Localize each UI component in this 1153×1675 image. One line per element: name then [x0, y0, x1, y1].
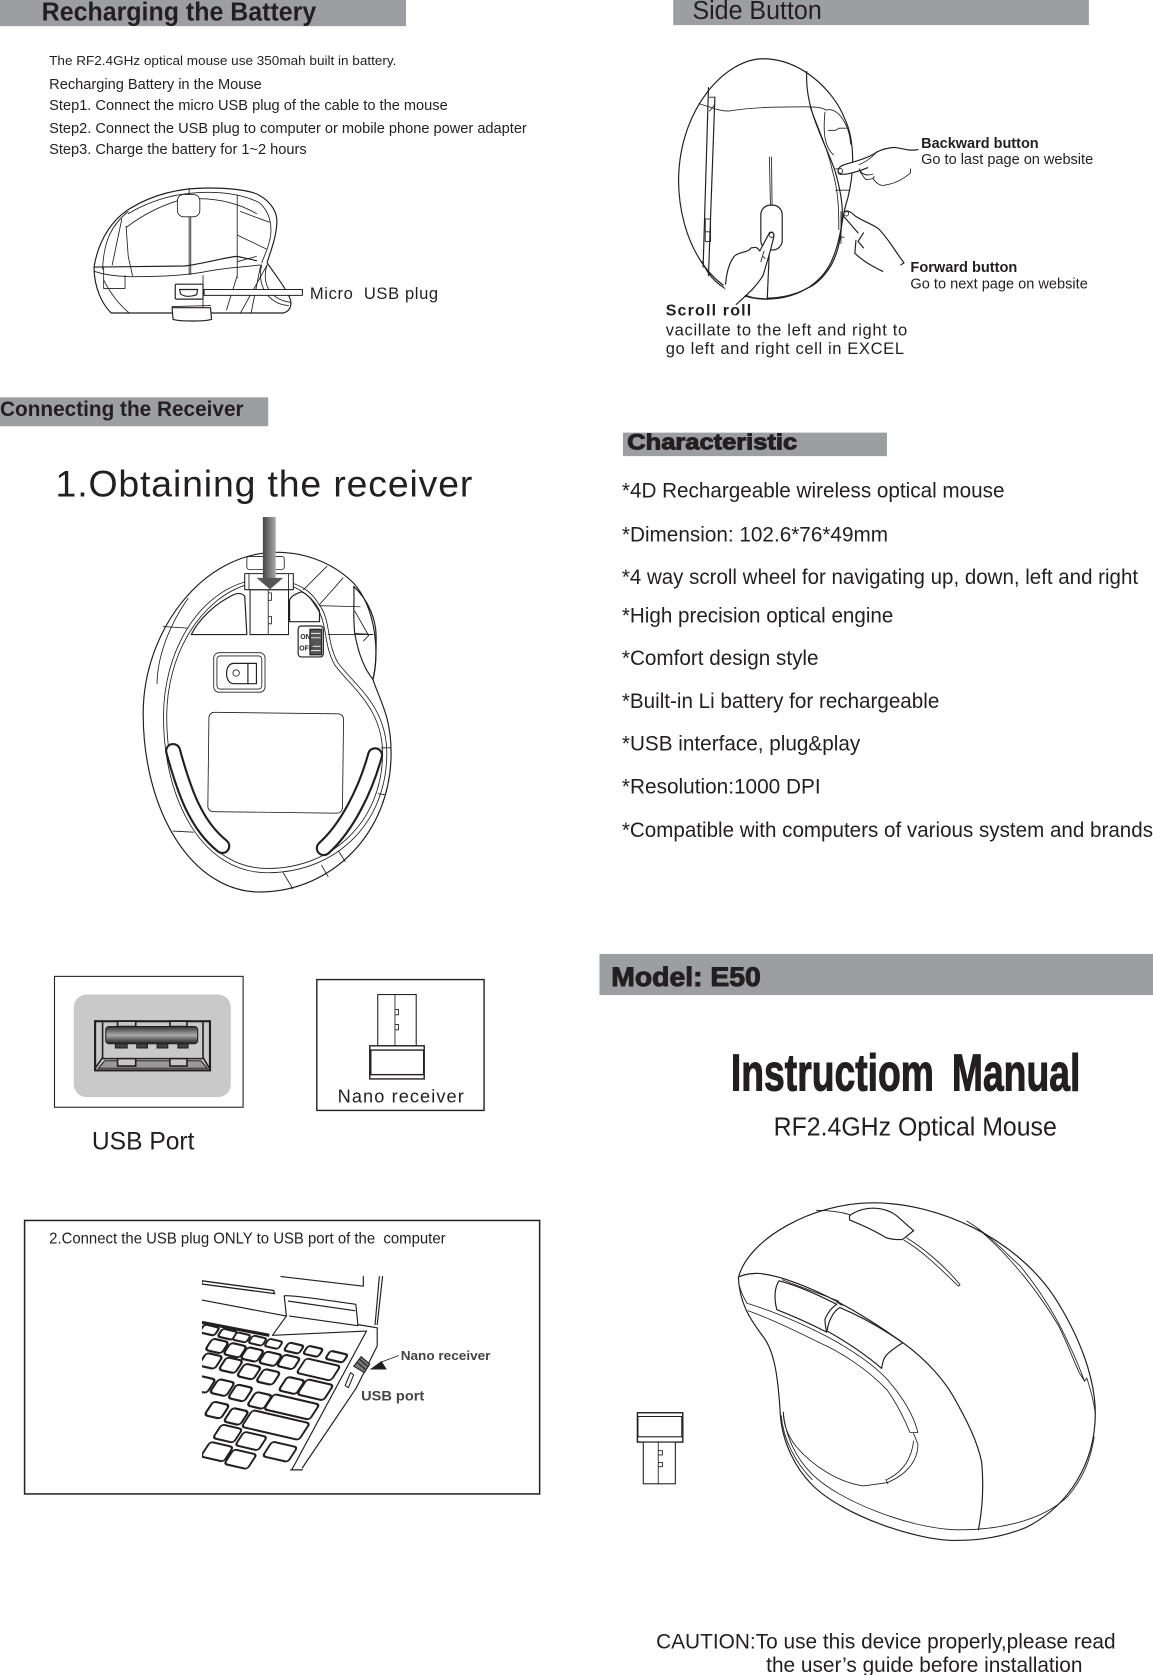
icon: on/off switch [298, 626, 323, 657]
callout: forward button: Go to next page on website [910, 275, 1088, 292]
heading: model: Model: E50 [611, 962, 761, 992]
list: product features: *Comfort design style [622, 646, 819, 670]
panel: USB port [54, 976, 243, 1155]
label: nano receiver: Nano receiver [338, 1086, 464, 1106]
label: nano receiver in laptop: Nano receiver [401, 1348, 490, 1363]
panel: recharging the battery [0, 0, 527, 321]
callout: scroll roll [666, 302, 907, 358]
icon: on/off switch: ON [300, 634, 311, 641]
heading: connecting the receiver: Connecting the Receiver [0, 397, 244, 421]
list: product features: *Built-in Li battery for rechargeable [622, 689, 939, 713]
illustration: mouse front with micro USB plug [94, 188, 438, 321]
list: product features: *4D Rechargeable wireless optical mouse [622, 478, 1004, 502]
list: product features: *USB interface, plug&play [622, 732, 861, 756]
list: product features: *Resolution:1000 DPI [622, 774, 821, 798]
callout: forward button [910, 259, 1088, 292]
list: product features: *4 way scroll wheel for navigating up, down, left and right [622, 565, 1138, 589]
callout: scroll roll: Scroll roll [666, 302, 751, 320]
callout: backward button: Go to last page on website [921, 151, 1093, 168]
panel: connect USB plug to computer [25, 1220, 540, 1494]
arrow: to nano receiver [370, 1356, 399, 1369]
icon: nano receiver [370, 995, 424, 1079]
panel: nano receiver [317, 980, 484, 1110]
text: connect instruction: 2.Connect the USB plug ONLY to USB port of the computer [49, 1230, 446, 1247]
heading: model [599, 954, 1153, 995]
icon: insertion arrow [256, 517, 283, 589]
icon: on/off switch: OFF [299, 646, 313, 653]
callout: backward button [921, 135, 1093, 168]
text block: battery instructions: The RF2.4GHz optical mouse use 350mah built in battery. [49, 53, 396, 68]
heading: characteristic: Characteristic [627, 430, 797, 455]
list: product features: *Dimension: 102.6*76*49mm [622, 522, 888, 546]
panel: connecting the receiver [0, 397, 540, 1494]
text block: caution [656, 1629, 1116, 1675]
illustration: mouse underside with receiver [143, 517, 391, 892]
icon: forward hand [844, 211, 904, 271]
mouse feet [173, 751, 375, 848]
callout: backward button: Backward button [921, 135, 1039, 152]
list: product features [622, 478, 1153, 842]
label plate [208, 712, 344, 813]
panel: characteristic [622, 430, 1153, 842]
callout: scroll roll: vacillate to the left and right to [666, 320, 907, 339]
callout: scroll roll: go left and right cell in EXCEL [666, 339, 904, 358]
illustration: mouse [738, 1203, 1095, 1540]
icon: backward hand [838, 147, 918, 185]
heading: side button [673, 0, 1089, 25]
text block: battery instructions: Step2. Connect the USB plug to computer or mobile phone power adapter [49, 121, 527, 137]
text block: caution: CAUTION:To use this device properly,please read [656, 1629, 1116, 1653]
text block: battery instructions: Step1. Connect the micro USB plug of the cable to the mouse [49, 98, 448, 114]
callout: forward button: Forward button [910, 259, 1017, 276]
icon: USB socket [95, 1021, 210, 1070]
list: product features: *High precision optical engine [622, 603, 893, 627]
icon: plugged receiver [354, 1357, 370, 1373]
text block: battery instructions: Step3. Charge the battery for 1~2 hours [49, 142, 307, 158]
icon: receiver [637, 1413, 683, 1484]
heading: recharging the battery [0, 0, 406, 26]
icon: optical sensor [214, 653, 265, 692]
panel: cover [599, 954, 1153, 1675]
illustration: laptop with receiver [190, 1277, 490, 1470]
text block: battery instructions [49, 53, 527, 158]
label: micro USB plug: Micro USB plug [310, 284, 438, 303]
heading: characteristic [623, 430, 887, 456]
label: USB port: USB Port [92, 1128, 195, 1155]
icon: laptop USB port [345, 1373, 354, 1388]
illustration: mouse top view with hands [679, 59, 918, 304]
label: USB port in laptop: USB port [361, 1387, 425, 1403]
heading: obtaining the receiver: 1.Obtaining the receiver [56, 463, 472, 505]
text block: battery instructions: Recharging Battery in the Mouse [49, 77, 262, 93]
panel: side button [666, 0, 1093, 358]
subtitle: product name: RF2.4GHz Optical Mouse [774, 1114, 1057, 1142]
icon: scroll hand [723, 232, 774, 304]
